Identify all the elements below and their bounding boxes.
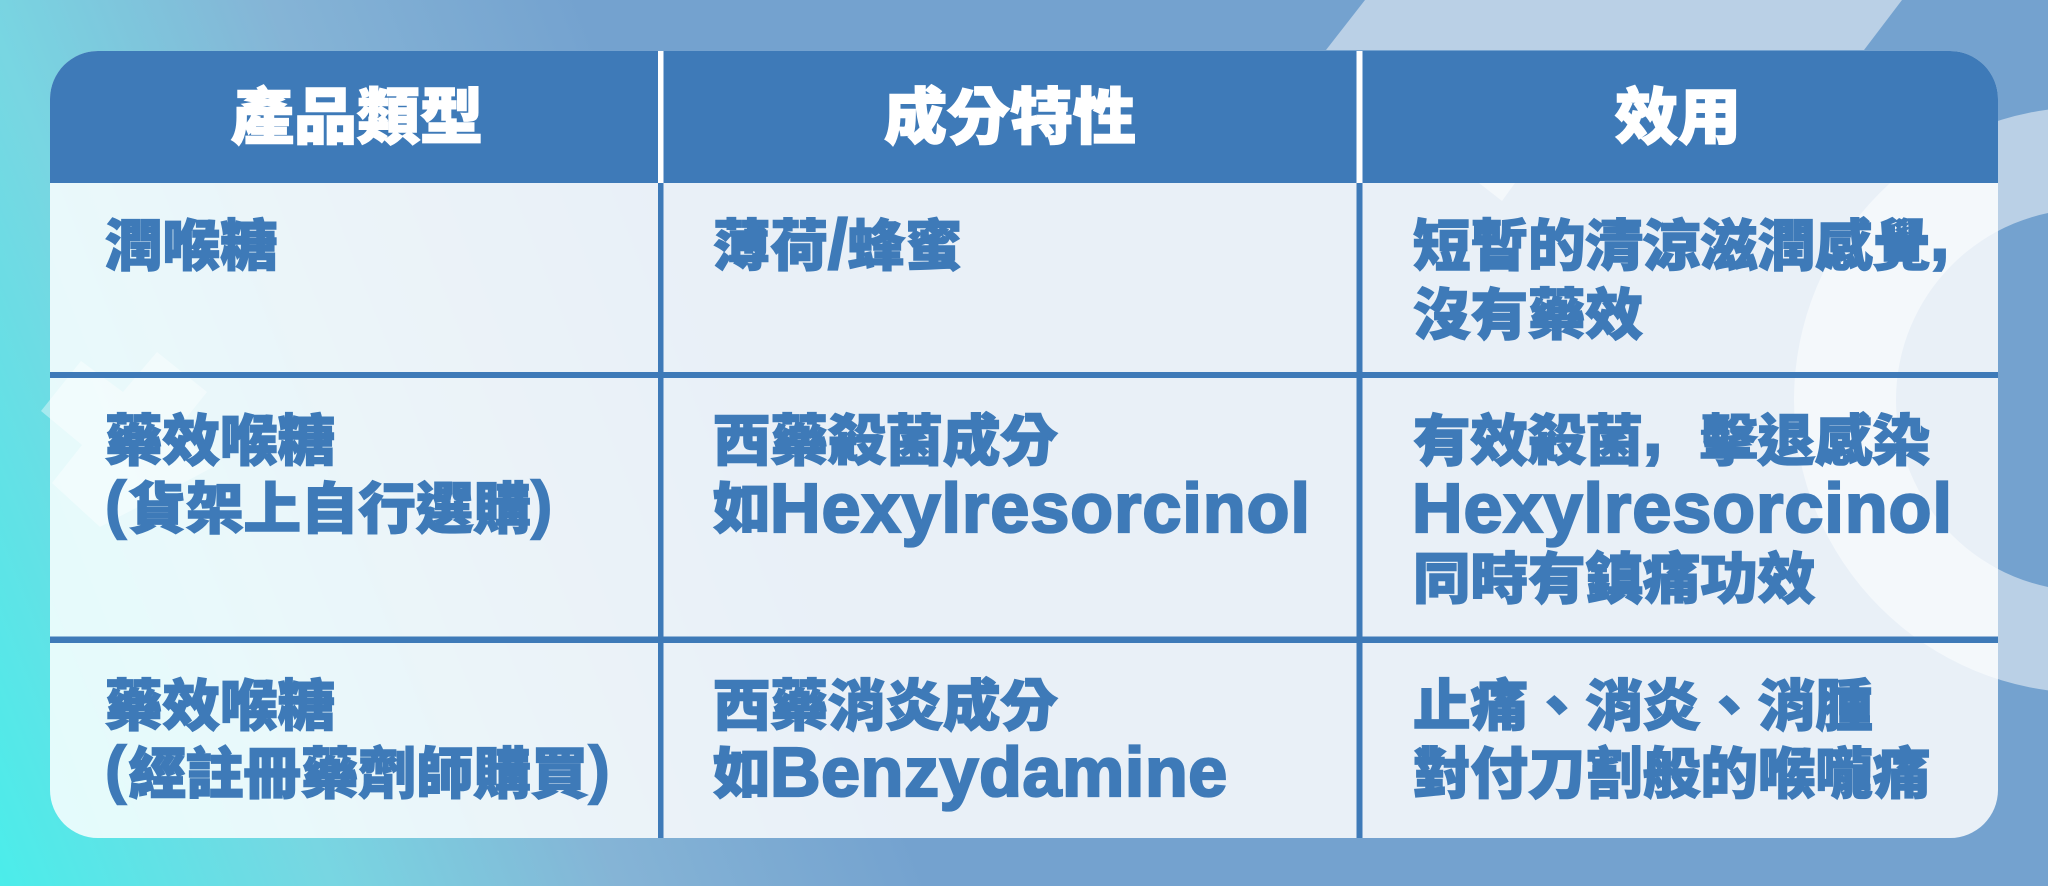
row 3 col 1 bbox=[105, 661, 610, 810]
header column dividers bbox=[658, 51, 1362, 183]
row 1 col 3: , bbox=[1930, 197, 1949, 275]
row 3 col 1: 經註冊藥劑師購買 bbox=[128, 729, 588, 810]
shape: small triangle under header bbox=[1479, 183, 1515, 201]
row 2 col 3: 同時有鎮痛功效 bbox=[1413, 534, 1815, 615]
row 1 col 3: 沒有藥效 bbox=[1413, 270, 1643, 351]
row 3 col 1: 藥效喉糖 bbox=[105, 661, 335, 742]
heading: ingredients: 成分特性 bbox=[884, 68, 1136, 156]
row 3 col 2: Benzydamine bbox=[770, 733, 1228, 811]
row 2 col 1: 藥效喉糖 bbox=[105, 396, 335, 477]
row 2 col 3: 擊退感染 bbox=[1700, 396, 1930, 477]
row 1 col 1: 潤喉糖 bbox=[105, 201, 277, 282]
row 2 col 1: 貨架上自行選購 bbox=[128, 464, 531, 545]
header band bbox=[50, 51, 1998, 183]
row 3 col 1: ( bbox=[105, 733, 127, 805]
row 3 col 3 bbox=[1413, 661, 1930, 810]
row 3 col 3: 止痛、消炎、消腫 bbox=[1413, 661, 1873, 742]
row 1 col 2: 薄荷 bbox=[713, 201, 828, 282]
row 3 col 2: 如 bbox=[713, 729, 770, 810]
row 2 col 2: Hexylresorcinol bbox=[770, 469, 1311, 547]
row 2 col 1: ( bbox=[105, 468, 127, 540]
row 3 col 2: 西藥消炎成分 bbox=[713, 661, 1058, 742]
heading: product type: 產品類型 bbox=[231, 68, 483, 156]
row 2 col 2: 如 bbox=[713, 464, 770, 545]
shape: ring right bbox=[1794, 107, 2048, 693]
shape: white diamonds left bbox=[41, 352, 217, 527]
row 3 col 1: ) bbox=[588, 733, 610, 805]
row dividers bbox=[50, 372, 1998, 643]
row 2 col 3: Hexylresorcinol bbox=[1412, 469, 1953, 547]
row 3 col 2 bbox=[713, 661, 1228, 811]
heading: effects: 效用 bbox=[1615, 68, 1741, 156]
row 1 col 3 bbox=[1413, 197, 1949, 351]
decorative shapes bbox=[41, 0, 2048, 693]
body column dividers bbox=[658, 183, 1362, 838]
row 1 col 2: 蜂蜜 bbox=[848, 201, 962, 282]
row 2 col 2: 西藥殺菌成分 bbox=[713, 396, 1058, 477]
row 1 col 2 bbox=[713, 201, 962, 283]
row 1 col 2: / bbox=[828, 205, 847, 283]
shape: parallelogram top right bbox=[1326, 0, 1902, 50]
row 2 col 1 bbox=[105, 396, 552, 545]
row 2 col 3 bbox=[1412, 392, 1953, 615]
row 1 col 3: 短暫的清涼滋潤感覺 bbox=[1413, 201, 1930, 282]
row 2 col 3: 有效殺菌 bbox=[1413, 396, 1643, 477]
row 2 col 3: , bbox=[1643, 392, 1662, 470]
row 3 col 3: 對付刀割般的喉嚨痛 bbox=[1413, 729, 1930, 810]
row 2 col 1: ) bbox=[531, 468, 552, 540]
row 2 col 2 bbox=[713, 396, 1311, 547]
